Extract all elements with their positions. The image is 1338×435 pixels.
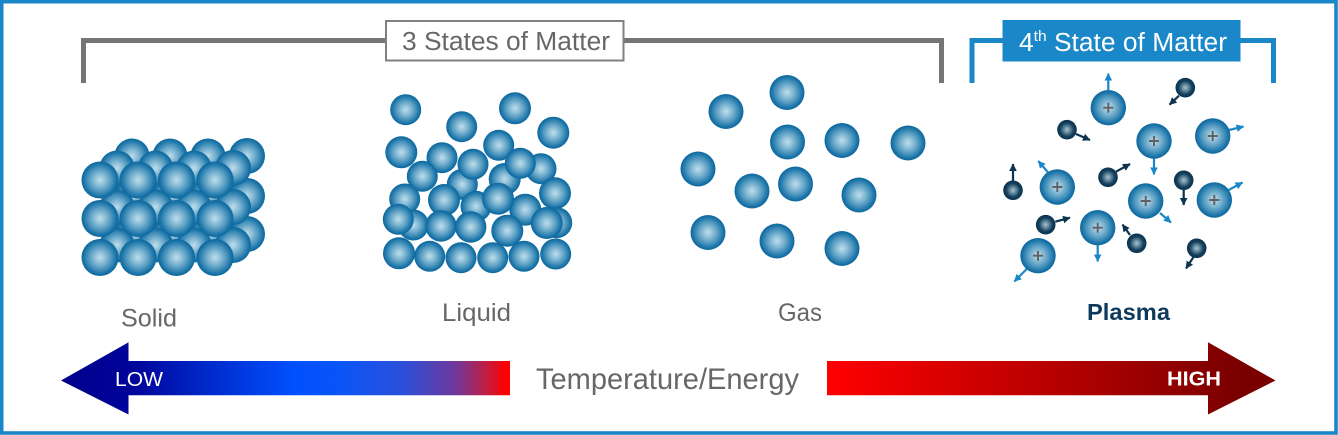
label: Solid: Solid bbox=[121, 304, 177, 332]
label: 4th State of Matter bbox=[1002, 20, 1240, 62]
label: LOW: LOW bbox=[115, 369, 163, 391]
label: 4th State of Matter: State of Matter bbox=[1047, 29, 1228, 57]
ions bbox=[1020, 90, 1232, 273]
ion arrows bbox=[1014, 74, 1244, 282]
label: 4th State of Matter: 4 bbox=[1019, 29, 1033, 57]
gas particles bbox=[680, 75, 926, 266]
bracket: 4th state of matter bbox=[972, 20, 1274, 83]
label: Gas: Gas bbox=[778, 299, 822, 327]
axis label: Temperature/Energy: Temperature/Energy bbox=[536, 363, 799, 396]
label: 3 States of Matter: 3 States of Matter bbox=[402, 28, 611, 56]
label: Liquid: Liquid bbox=[442, 299, 511, 327]
plus signs bbox=[1033, 103, 1219, 261]
label: 3 States of Matter bbox=[386, 21, 624, 60]
label: HIGH: HIGH bbox=[1167, 368, 1221, 390]
plasma particles bbox=[1003, 74, 1244, 282]
electron arrows bbox=[1013, 96, 1193, 268]
label: Plasma: Plasma bbox=[1087, 299, 1171, 325]
label: 4th State of Matter: th bbox=[1034, 28, 1047, 45]
solid particles bbox=[82, 138, 265, 276]
arrow: low temperature bbox=[61, 342, 510, 414]
bracket: 3 states of matter bbox=[84, 21, 942, 83]
electrons bbox=[1003, 78, 1206, 258]
arrow: high temperature bbox=[827, 342, 1276, 414]
liquid particles bbox=[383, 92, 572, 273]
